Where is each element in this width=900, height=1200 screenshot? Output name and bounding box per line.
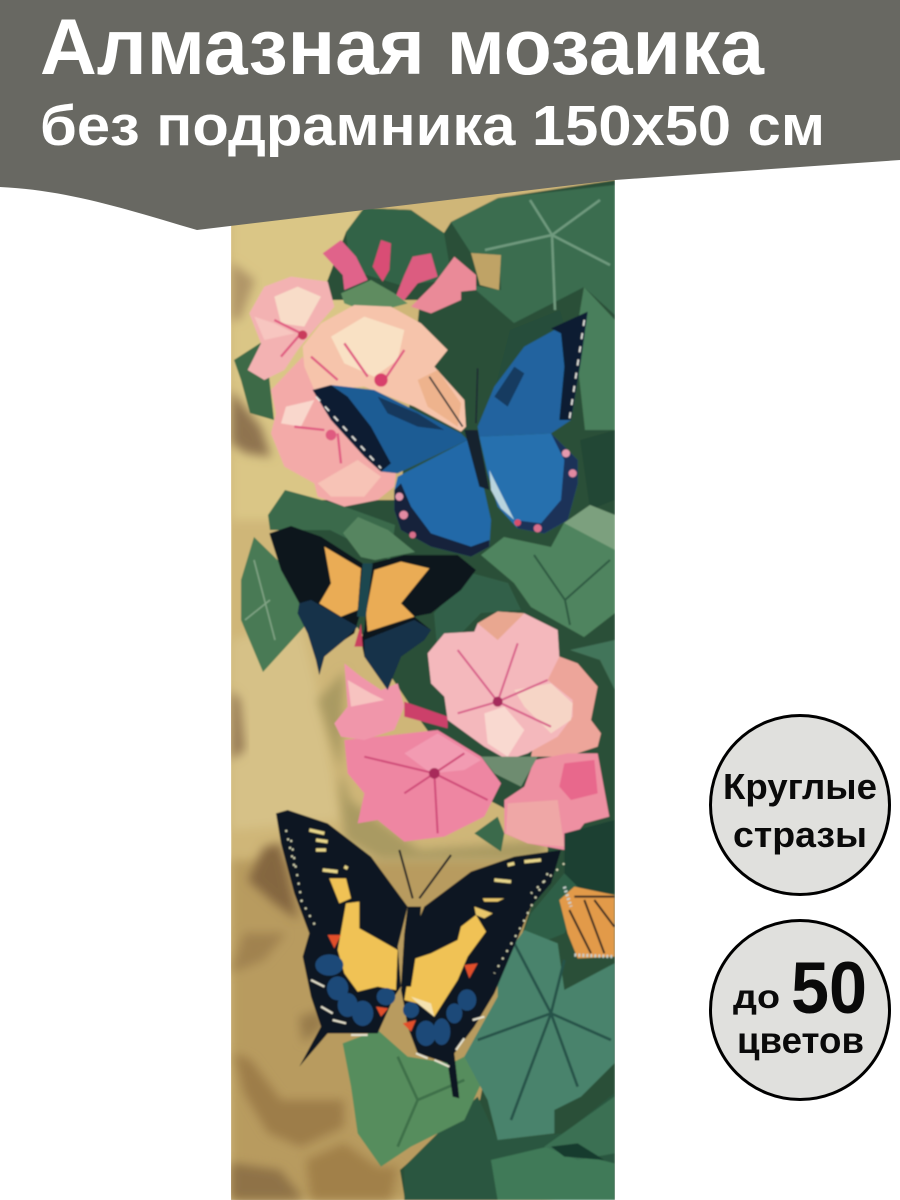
lower and right leaves: [343, 820, 614, 1200]
parchment background: [231, 170, 615, 1200]
orange-black butterfly: [269, 526, 476, 690]
badge: round rhinestones: [710, 716, 890, 894]
blue butterfly: [313, 312, 588, 557]
painting: butterflies and flowers: [231, 170, 615, 1200]
title: Алмазная мозаика: [40, 2, 765, 91]
left and middle leaves: [234, 340, 615, 690]
header banner: [0, 0, 900, 230]
badge: round rhinestones: Круглые: [723, 766, 877, 807]
pink lower flowers: [334, 612, 609, 852]
yellow swallowtail butterfly: [276, 810, 564, 1098]
top pink flowers and buds: [248, 240, 476, 507]
badge: round rhinestones: стразы: [733, 814, 867, 855]
badge: up to 50 colours: 50: [791, 948, 867, 1029]
subtitle: без подрамника 150х50 см: [40, 94, 825, 158]
badge: up to 50 colours: до: [733, 978, 780, 1015]
badge: up to 50 colours: [710, 920, 890, 1100]
badge: up to 50 colours: цветов: [737, 1020, 864, 1061]
small monarch butterfly: [559, 887, 614, 958]
green foliage base: [268, 180, 615, 1200]
